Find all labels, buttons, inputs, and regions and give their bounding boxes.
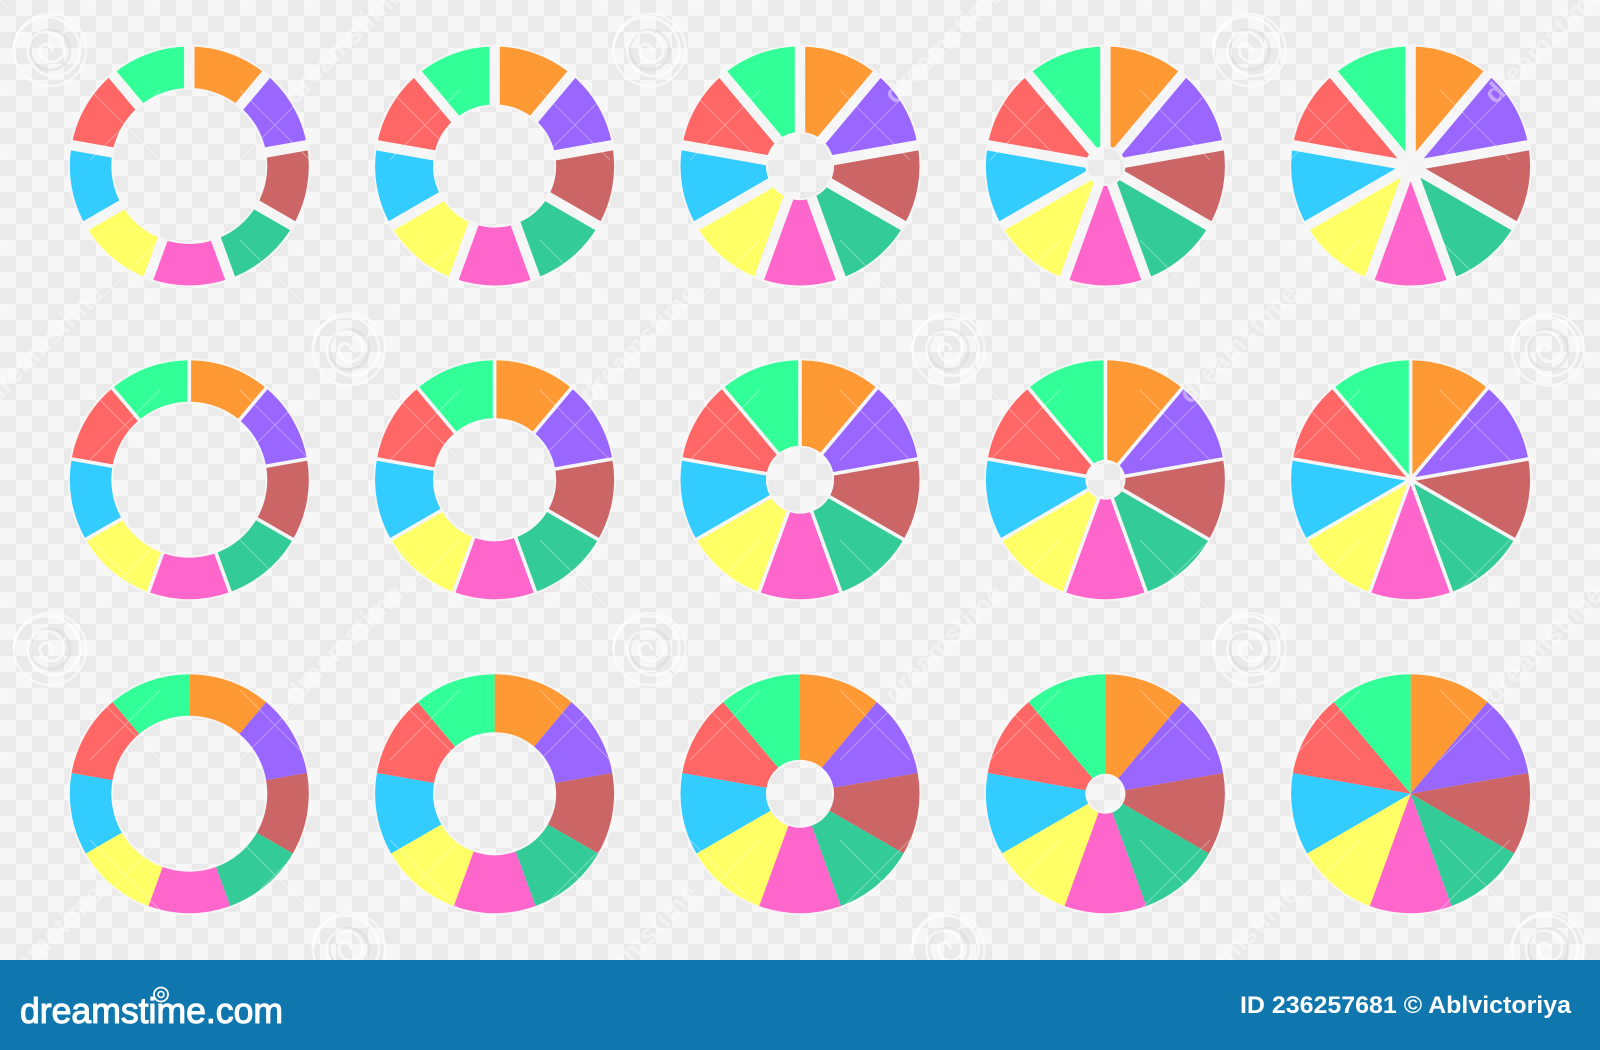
row 1: donut and pie charts with wide gaps (68, 44, 1532, 288)
footer bar (0, 960, 1600, 1050)
watermark: diagonal text: dreamstime (573, 278, 704, 409)
chart: row 3 pie (1269, 653, 1546, 932)
chart: row 2 medium donut (374, 358, 616, 601)
chart: row 2 pie (1290, 358, 1532, 601)
chart: row 1 small-hole donut (984, 44, 1226, 288)
chart: row 3 thin donut (47, 653, 325, 932)
chart: row 2 small-hole donut (984, 358, 1226, 601)
row 2: donut and pie charts with thin gaps (68, 358, 1532, 601)
chart: row 2 thick donut (678, 358, 922, 601)
watermark: diagonal text: dreamstime (573, 878, 704, 1009)
watermark: diagonal text: dreamstime (278, 578, 409, 709)
chart: row 3 medium donut (353, 653, 630, 932)
row 3: donut and pie charts without gaps (47, 653, 1546, 932)
watermark: diagonal text: dreamstime (878, 578, 1009, 709)
chart: row 1 thick donut (678, 44, 921, 288)
chart: row 2 thin donut (68, 358, 310, 601)
footer logo spiral icon (154, 988, 168, 1002)
footer image id and author credit: ID 236257681 © Ablvictoriya (1240, 992, 1572, 1019)
watermark: diagonal text: dreamstime (1173, 278, 1304, 409)
chart: row 1 medium donut (374, 44, 616, 288)
chart: row 1 pie (1290, 44, 1532, 288)
chart: row 3 thick donut (658, 653, 936, 932)
watermark: diagonal text: dreamstime (1173, 878, 1304, 1009)
footer logo text: dreamstime.com (20, 990, 283, 1031)
chart: row 1 thin donut (68, 44, 310, 288)
chart: row 3 small-hole donut (964, 653, 1241, 932)
